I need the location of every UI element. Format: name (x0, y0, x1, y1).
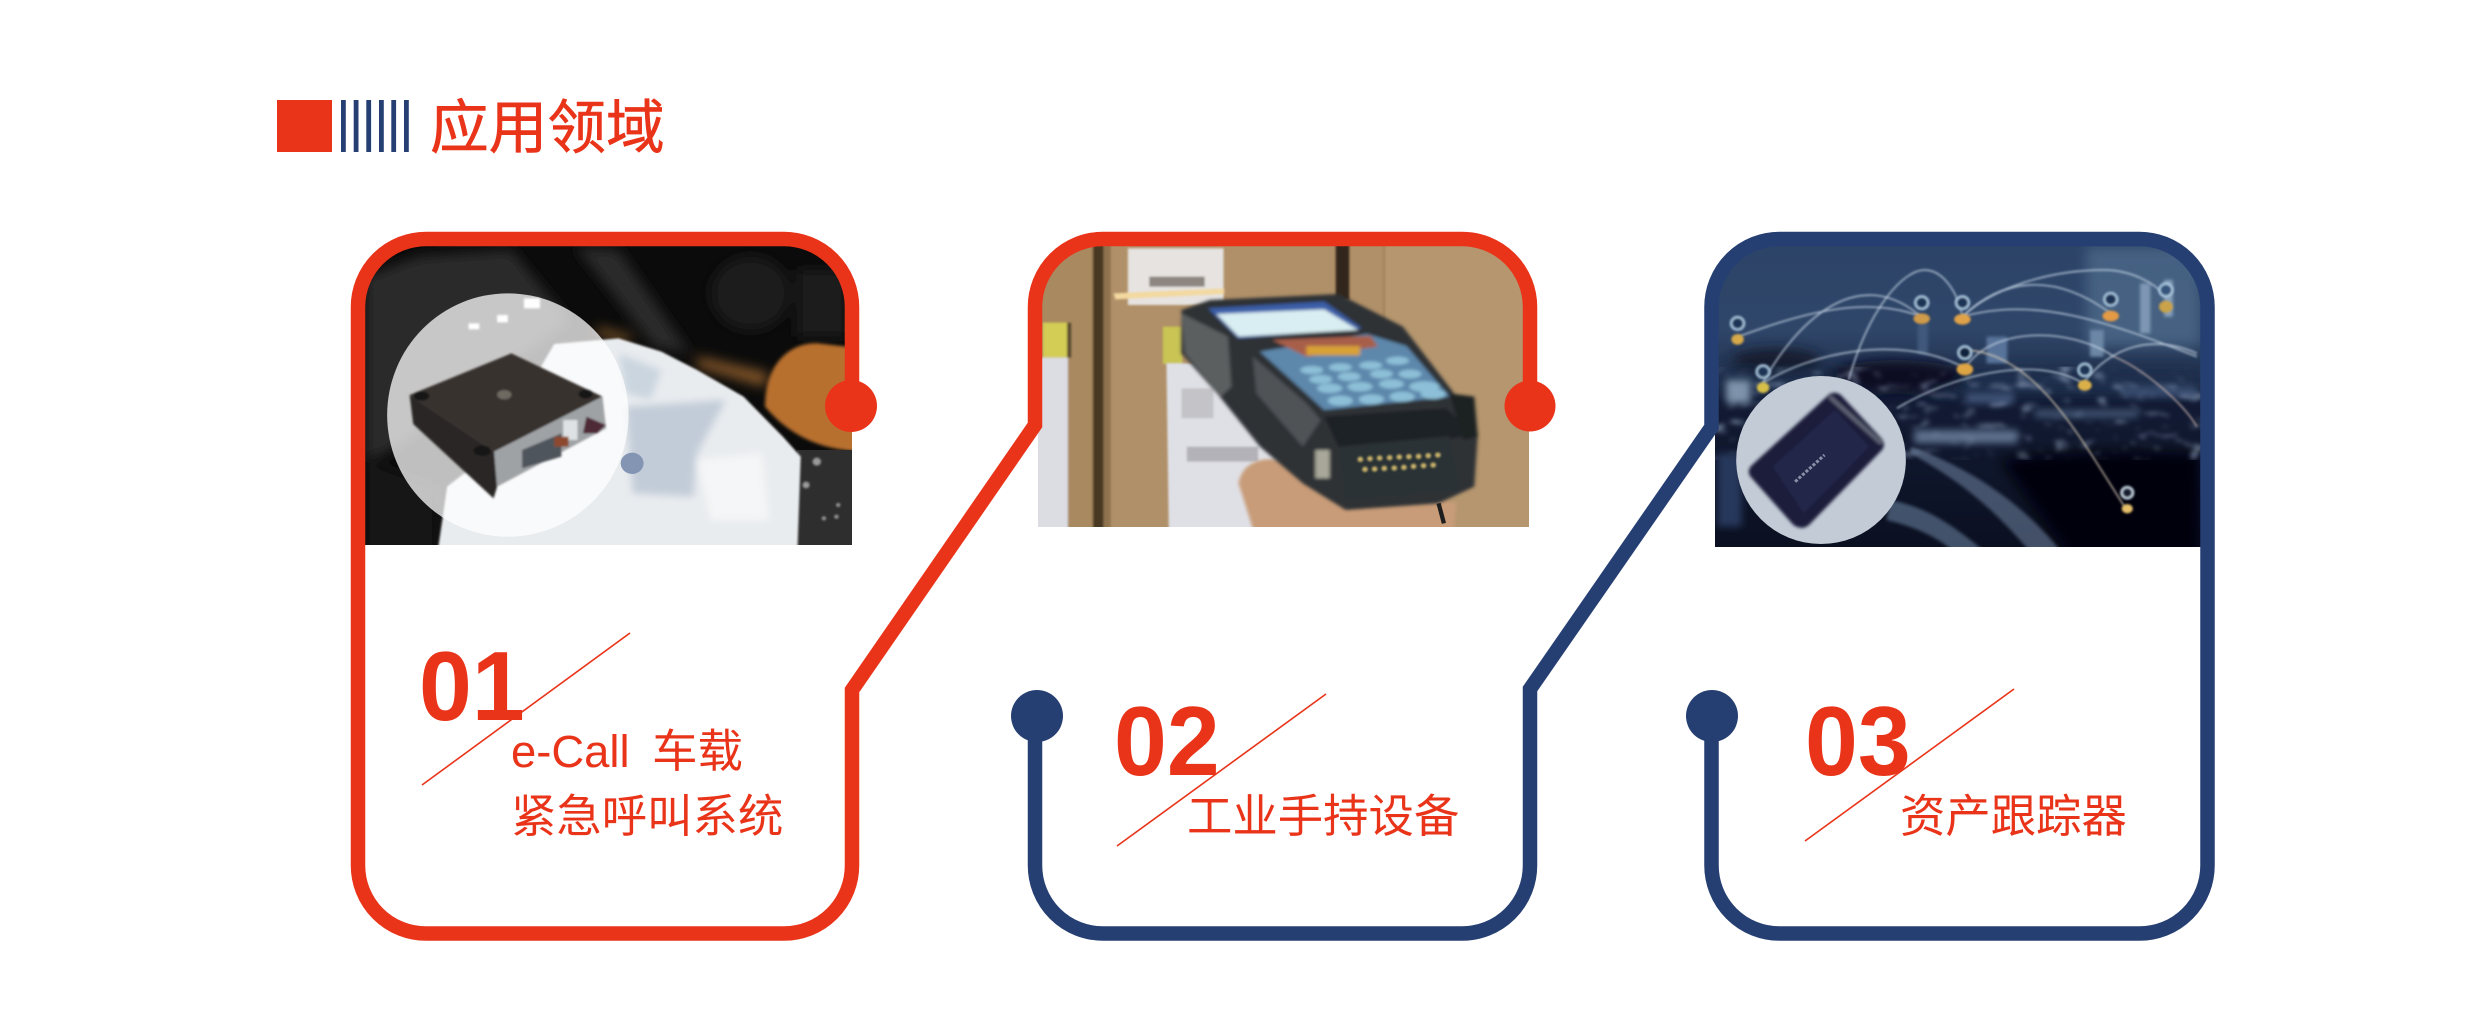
section header (277, 96, 665, 161)
label: e-Call: e-Call 车载 (511, 726, 743, 777)
number 01: 01 (419, 633, 525, 741)
photo: handheld scanner (1038, 246, 1529, 527)
red outline connecting panels 01 and 02 (358, 239, 1530, 934)
navy outline connecting panels 02 and 03 (1035, 239, 2208, 934)
label: industrial handheld: 工业手持设备 (1187, 791, 1459, 842)
photo: airbag and e-Call module (365, 246, 852, 545)
title: 应用领域 (430, 96, 665, 161)
city lights (1704, 367, 2228, 460)
diagonal line 01 (422, 633, 630, 785)
icon: red square (277, 100, 332, 152)
panel: handheld device (1028, 237, 1542, 846)
map pins (1731, 284, 2173, 513)
photo: city network with tracker (1715, 246, 2200, 547)
number 02: 02 (1114, 688, 1220, 796)
node: red dot panel 01 (825, 380, 877, 432)
panel: e-Call (354, 237, 861, 842)
module box (410, 353, 606, 498)
node: navy dot panel 02 (1011, 690, 1063, 742)
connector pins (1357, 452, 1441, 472)
panel: asset tracker (1704, 240, 2228, 842)
label: e-Call: 紧急呼叫系统 (511, 791, 783, 842)
label: asset tracker: 资产跟踪器 (1900, 791, 2127, 842)
scanner body (1181, 294, 1478, 510)
node: navy dot panel 03 (1686, 690, 1738, 742)
tracker device (1736, 376, 1906, 544)
number 03: 03 (1805, 688, 1911, 796)
diagonal line 03 (1805, 689, 2014, 841)
icon: navy stripes (341, 100, 409, 152)
diagonal line 02 (1117, 694, 1326, 846)
network arcs (1738, 270, 2197, 507)
node: red dot panel 02 (1504, 380, 1556, 432)
